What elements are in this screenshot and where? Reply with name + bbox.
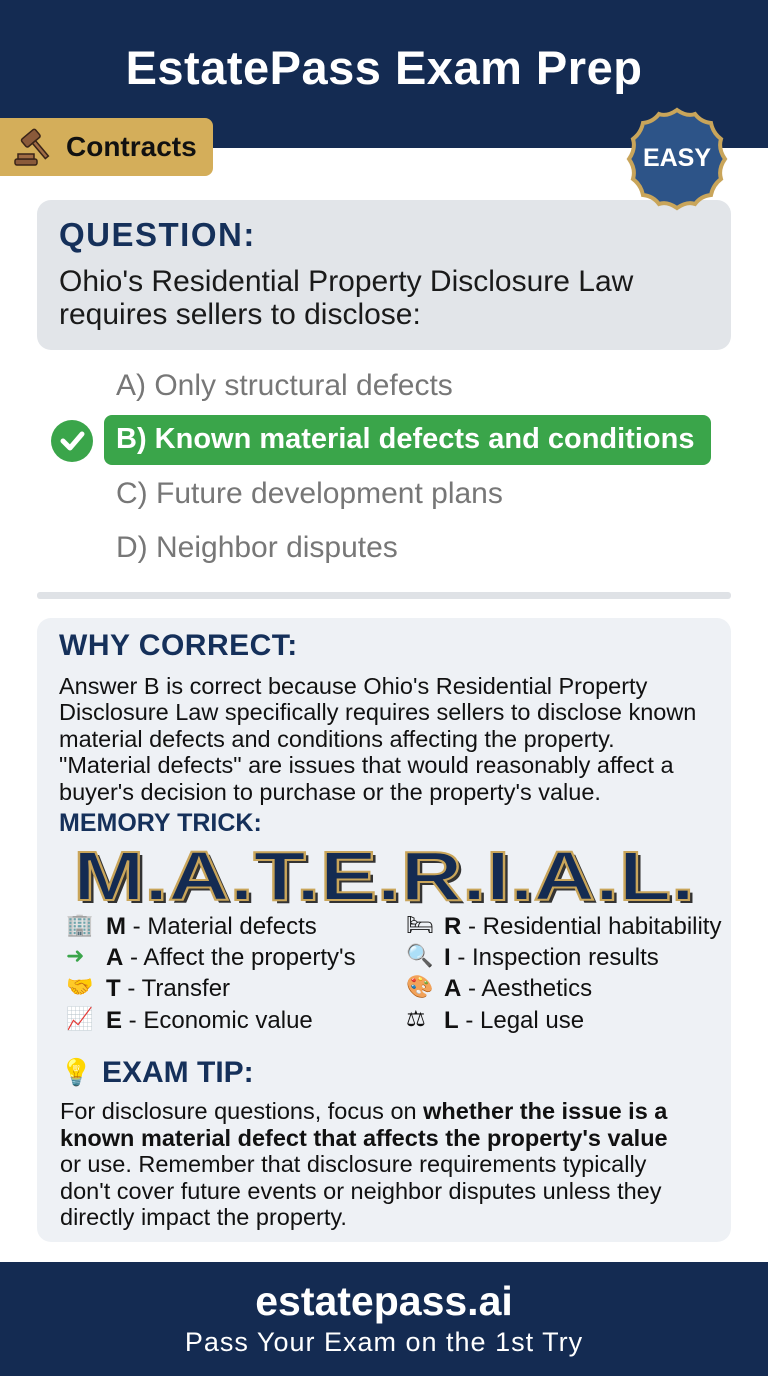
mnemonic list: A - Aesthetics [444, 975, 592, 1002]
mnemonic list: I - Inspection results [444, 944, 659, 971]
heading: EXAM TIP: EXAM TIP: [102, 1056, 254, 1089]
exam tip text: directly impact the property. [60, 1204, 347, 1230]
mnemonic list [66, 912, 722, 1034]
question text: Ohio's Residential Property Disclosure Law [59, 265, 633, 298]
icon: gavel [14, 128, 50, 166]
header [0, 0, 768, 148]
exam tip text: For disclosure questions, focus on whether the issue is a [60, 1098, 667, 1124]
panel: explanation [37, 618, 731, 1242]
mnemonic: MATERIAL: M.A.T.E.R.I.A.L. [73, 837, 695, 915]
footer [0, 1262, 768, 1376]
title: EstatePass Exam Prep [126, 41, 642, 94]
explanation text: Answer B is correct because Ohio's Residential Property [59, 673, 647, 699]
explanation text: Disclosure Law specifically requires sellers to disclose known [59, 699, 696, 725]
heading: MEMORY TRICK: MEMORY TRICK: [59, 809, 262, 837]
explanation text: buyer's decision to purchase or the property's value. [59, 779, 601, 805]
exam tip text [60, 1098, 668, 1230]
mnemonic list: M - Material defects [106, 913, 317, 940]
icon: check [51, 420, 93, 462]
option B correct: B) Known material defects and conditions [116, 423, 694, 455]
mnemonic list: L - Legal use [444, 1007, 584, 1034]
explanation text: "Material defects" are issues that would reasonably affect a [59, 752, 674, 778]
badge: EASY [626, 108, 728, 210]
mnemonic list: E - Economic value [106, 1007, 313, 1034]
explanation text: material defects and conditions affecting the property. [59, 726, 615, 752]
question text [59, 265, 634, 331]
category tag: Contracts: Contracts [66, 131, 197, 162]
footer tagline: Pass Your Exam on the 1st Try [185, 1327, 583, 1357]
heading: QUESTION: QUESTION: [59, 216, 256, 253]
mnemonic list: 🎨 [406, 974, 433, 999]
exam tip text: don't cover future events or neighbor disputes unless they [60, 1178, 662, 1204]
mnemonic list: 🤝 [66, 974, 93, 999]
heading: EXAM TIP: 💡 [60, 1057, 92, 1087]
footer site: estatepass.ai [255, 1278, 513, 1324]
mnemonic list: 📈 [66, 1006, 93, 1031]
category tag: Contracts [0, 118, 213, 176]
option B correct [104, 415, 711, 465]
heading: WHY CORRECT: WHY CORRECT: [59, 629, 298, 662]
explanation text [59, 673, 696, 805]
exam tip text: or use. Remember that disclosure requirements typically [60, 1151, 646, 1177]
mnemonic list: A - Affect the property's [106, 944, 356, 971]
mnemonic list: 🔍 [406, 943, 433, 968]
option A: A) Only structural defects [116, 369, 453, 402]
mnemonic list: R - Residential habitability [444, 913, 721, 940]
mnemonic list: T - Transfer [106, 975, 230, 1002]
mnemonic list: ⚖ [406, 1006, 426, 1031]
mnemonic list: ➜ [66, 943, 84, 968]
mnemonic list: 🏢 [66, 912, 93, 937]
option C: C) Future development plans [116, 477, 503, 510]
exam tip text: known material defect that affects the property's value [60, 1124, 668, 1150]
panel: question [37, 200, 731, 350]
mnemonic list: 🛏 [406, 912, 434, 937]
badge: EASY: EASY [643, 144, 711, 172]
option D: D) Neighbor disputes [116, 531, 398, 564]
question text: requires sellers to disclose: [59, 298, 421, 331]
